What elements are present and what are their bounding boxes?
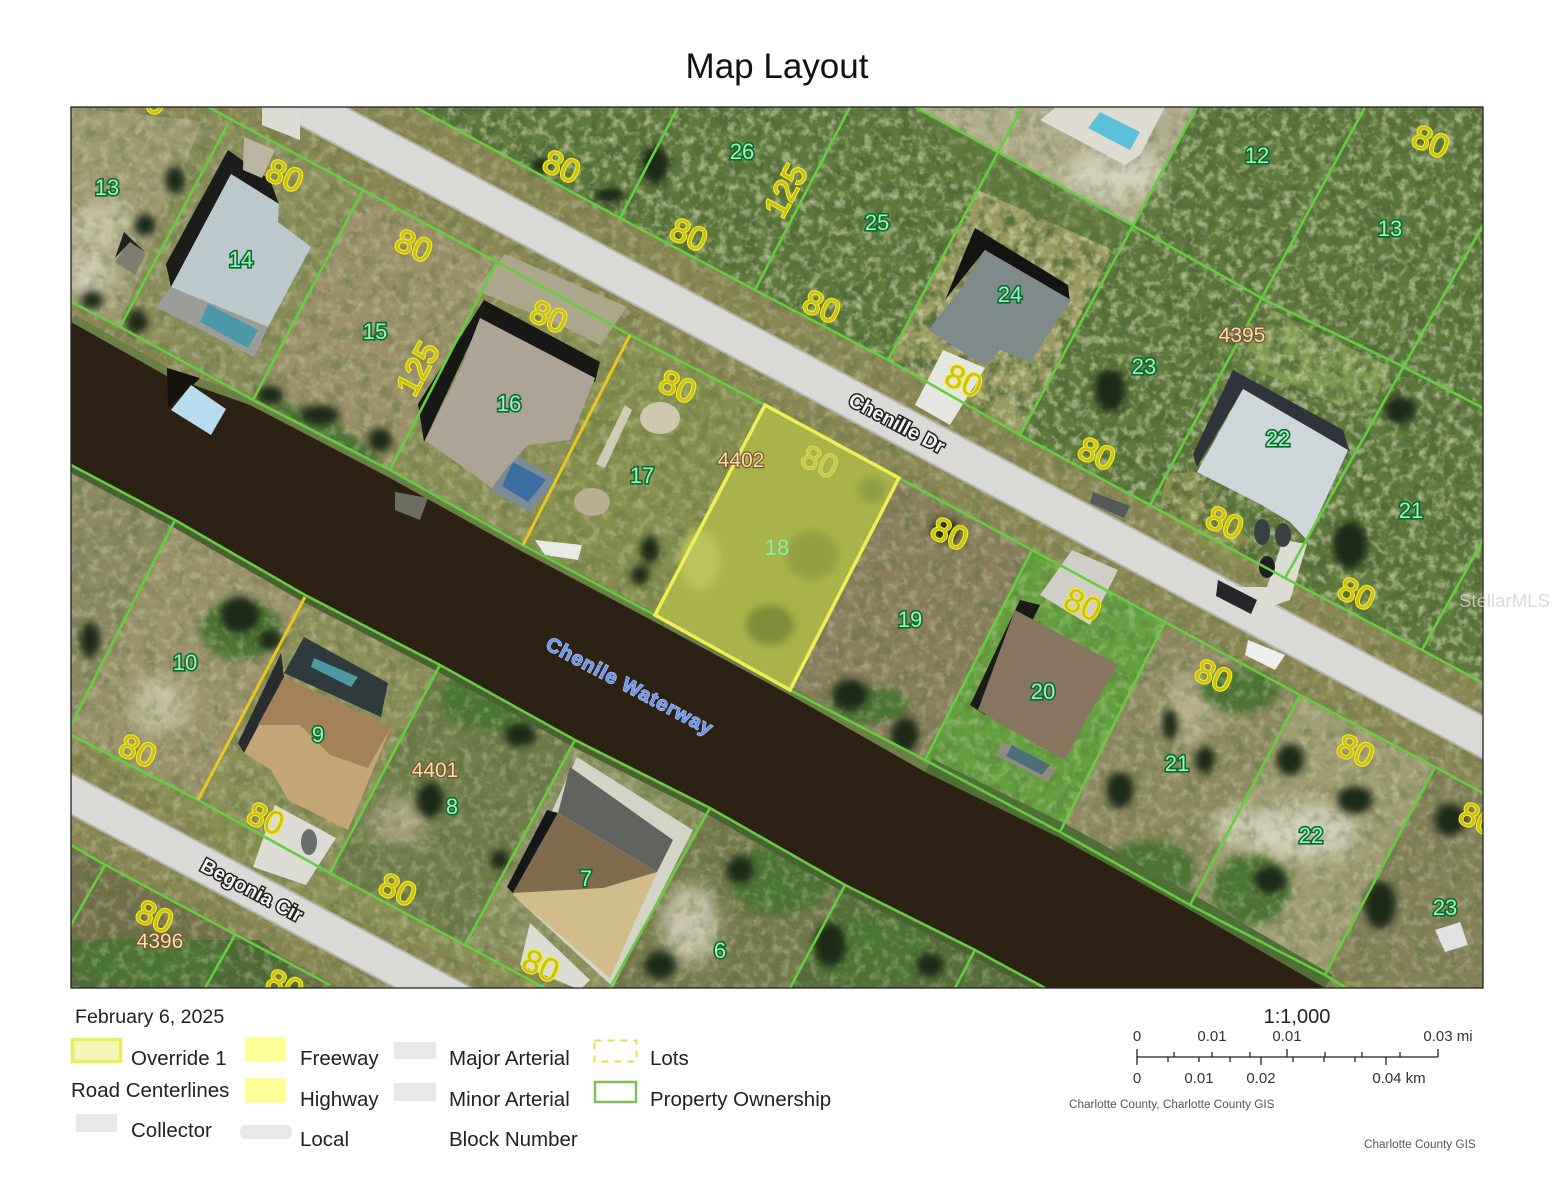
ground texture [71, 107, 1483, 988]
legend: Local [240, 1125, 349, 1151]
road: Begonia Cir [72, 772, 473, 988]
map frame [71, 107, 1483, 988]
date: February 6, 2025 [75, 1006, 224, 1028]
watermark: StellarMLS [1459, 590, 1550, 611]
lot numbers: 20 [1031, 679, 1055, 704]
lot numbers: 14 [229, 247, 253, 272]
lot lines in yellow [198, 335, 630, 800]
lot frontage dimensions: 80 [939, 356, 988, 405]
scale labels in kilometres: 0.04 km [1372, 1070, 1426, 1087]
scale labels in kilometres [1133, 1070, 1426, 1087]
small shed [115, 232, 145, 275]
lot numbers: 23 [1433, 895, 1457, 920]
lot numbers: 21 [1399, 498, 1423, 523]
lot frontage dimensions: 80 [797, 282, 846, 331]
lot frontage dimensions: 80 [653, 362, 702, 411]
lot frontage dimensions: 80 [1331, 726, 1380, 775]
house lot 16 [418, 300, 600, 512]
scale labels in miles: 0.03 mi [1423, 1028, 1473, 1045]
block numbers: 4402 [718, 449, 764, 472]
lot frontage dimensions: 80 [1406, 117, 1455, 166]
scale labels in miles [1133, 1028, 1473, 1045]
lot frontage dimensions: 80 [1189, 651, 1238, 700]
legend: Collector [76, 1114, 212, 1142]
lot numbers: 12 [1245, 143, 1269, 168]
lot numbers: 10 [173, 650, 197, 675]
scale ratio: 1:1,000 [1264, 1006, 1330, 1028]
block numbers: 4396 [137, 930, 183, 953]
scale labels in kilometres: 0.01 [1184, 1070, 1214, 1087]
mottled vegetation texture [427, 108, 1482, 679]
lot frontage dimensions: 80 [1072, 429, 1121, 478]
credit line: Charlotte County, Charlotte County GIS [1069, 1098, 1275, 1111]
canal banks [71, 322, 1325, 988]
house lot 7 [507, 757, 693, 987]
legend: Override 1: Override 1 [131, 1047, 227, 1070]
lot numbers: 22 [1266, 426, 1290, 451]
lot frontage dimensions: 80 [113, 726, 162, 775]
lot fills [71, 107, 1483, 1030]
credit bottom right: Charlotte County GIS [1364, 1138, 1476, 1151]
house lot 14 [156, 137, 311, 357]
scale labels in miles: 0 [1133, 1028, 1141, 1045]
aerial map [72, 108, 1482, 988]
lot frontage dimensions: 80 [241, 794, 290, 843]
lot frontage dimensions: 125 [756, 157, 815, 223]
lot numbers: 13 [95, 175, 119, 200]
road: Chenille Dr [300, 108, 1482, 760]
legend: Highway [245, 1078, 379, 1111]
block numbers: 4401 [412, 759, 458, 782]
lot numbers: 25 [865, 210, 889, 235]
legend: Minor Arterial: Minor Arterial [449, 1088, 570, 1111]
boat dock [167, 368, 226, 435]
lot frontage dimensions: 80 [516, 941, 565, 990]
house lot 24 [928, 228, 1071, 366]
lot frontage dimensions: 80 [925, 509, 974, 558]
lot frontage dimensions: 80 [130, 892, 179, 941]
vegetated north lots [415, 107, 1483, 683]
block numbers [137, 324, 1265, 953]
vehicles and boats [301, 107, 1468, 952]
lot frontage dimensions: 80 [373, 865, 422, 914]
lot numbers: 13 [1378, 216, 1402, 241]
legend: Local: Local [300, 1128, 349, 1151]
lot numbers: 19 [898, 607, 922, 632]
lot numbers: 16 [497, 391, 521, 416]
legend: Minor Arterial [394, 1083, 570, 1111]
legend: Freeway [245, 1037, 379, 1070]
road label: Chenille Dr: Chenille Dr [845, 389, 948, 458]
legend: Freeway: Freeway [300, 1047, 379, 1070]
house lot 20 [970, 600, 1118, 782]
road label: Begonia Cir: Begonia Cir [197, 855, 306, 927]
lot frontage dimensions: 80 [524, 292, 573, 341]
property ownership lines [71, 107, 1483, 990]
house lot 9 [238, 637, 391, 830]
legend: Property Ownership [595, 1082, 831, 1111]
lot frontage dimensions: 80 [1453, 794, 1502, 843]
lot frontage dimensions: 80 [1200, 498, 1249, 547]
legend: Lots: Lots [650, 1047, 689, 1070]
legend: Block Number: Block Number [449, 1128, 578, 1151]
lot frontage dimensions: 80 [1058, 580, 1107, 629]
lot numbers: 17 [630, 463, 654, 488]
legend: Highway: Highway [300, 1088, 379, 1111]
lot numbers: 18 [765, 535, 789, 560]
lot frontage dimensions: 80 [389, 221, 438, 270]
lot numbers: 22 [1299, 823, 1323, 848]
legend [71, 1037, 831, 1151]
lot frontage dimensions: 80 [260, 151, 309, 200]
lot frontage dimensions: 80 [123, 74, 172, 123]
scale bar [1133, 1028, 1473, 1087]
lot numbers: 9 [312, 722, 324, 747]
title: Map Layout [686, 47, 869, 86]
Chenile Waterway canal [71, 322, 1325, 988]
lot numbers: 24 [998, 282, 1022, 307]
scale labels in miles: 0.01 [1197, 1028, 1227, 1045]
subject lot 18 outline [655, 405, 899, 690]
legend: Property Ownership: Property Ownership [650, 1088, 831, 1111]
legend: Major Arterial: Major Arterial [449, 1047, 570, 1070]
lot frontage dimensions [113, 74, 1502, 1010]
lot frontage dimensions: 125 [388, 335, 447, 401]
lot numbers: 6 [714, 938, 726, 963]
legend: Collector: Collector [131, 1119, 212, 1142]
lot numbers: 21 [1165, 751, 1189, 776]
legend: Override 1 [72, 1040, 227, 1070]
lot frontage dimensions: 80 [260, 961, 309, 1010]
scale labels in miles: 0.01 [1272, 1028, 1302, 1045]
tree clumps: dark [80, 145, 1466, 979]
lot numbers: 8 [446, 794, 458, 819]
water label: Chenile Waterway: Chenile Waterway [542, 633, 717, 740]
sand patches [65, 150, 1358, 965]
scale labels in kilometres: 0.02 [1246, 1070, 1276, 1087]
driveways [253, 107, 1307, 990]
scale labels in kilometres: 0 [1133, 1070, 1141, 1087]
lot numbers: 15 [363, 319, 387, 344]
lot numbers [95, 139, 1457, 963]
legend: Lots [594, 1040, 689, 1070]
tree clumps: green [70, 388, 1290, 985]
lot numbers: 26 [730, 139, 754, 164]
legend: Road Centerlines heading: Road Centerlines [71, 1079, 229, 1102]
legend: Major Arterial [394, 1042, 570, 1070]
house lot 22 north [1193, 370, 1350, 578]
lot frontage dimensions: 80 [537, 142, 586, 191]
lot numbers: 23 [1132, 354, 1156, 379]
subject lot 18 highlight [655, 405, 899, 690]
block numbers: 4395 [1219, 324, 1265, 347]
lot frontage dimensions: 80 [1332, 569, 1381, 618]
lot frontage dimensions: 80 [795, 437, 844, 486]
lot frontage dimensions: 80 [664, 210, 713, 259]
lot numbers: 7 [580, 866, 592, 891]
